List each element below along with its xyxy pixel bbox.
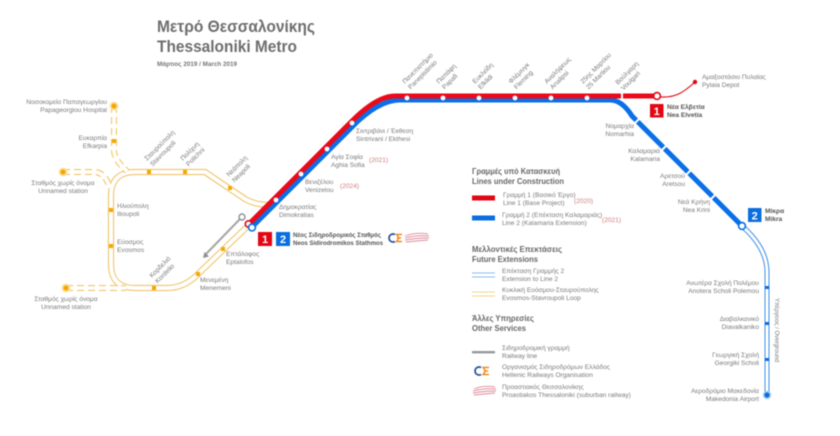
orange line terminals — [59, 102, 118, 292]
blue extension stations — [763, 286, 771, 399]
main line labels: Βούλγαρη — [614, 60, 641, 86]
Mikra badge: Mikra — [765, 216, 783, 223]
main line labels: Βενιζέλου — [305, 178, 334, 186]
legend: future extensions: Future Extensions — [472, 254, 538, 264]
Nea Elvetia badge: 1 — [654, 106, 660, 118]
orange loop line (future Evosmos-Stavroupoli) — [111, 172, 272, 288]
orange line station labels: Papageorgiou Hospital — [40, 107, 108, 114]
orange line station labels: Evosmos — [117, 247, 145, 254]
title — [157, 17, 315, 68]
interchange: Neos Sidirodromikos Stathmos: 1 — [262, 234, 268, 246]
orange line stations — [109, 139, 232, 290]
legend: future extensions: Evosmos-Stavroupoli Loop — [502, 295, 581, 302]
legend: lines under construction: (2021) — [602, 217, 621, 224]
main line labels: Ανωτέρα Σχολή Πολέμου — [686, 279, 759, 287]
legend: lines under construction: Line 1 (Base Project) — [503, 200, 565, 207]
orange dashed branches — [63, 106, 127, 288]
legend: other services: Άλλες Υπηρεσίες — [472, 313, 535, 323]
legend icon: OSE logo — [475, 367, 489, 375]
icon: Proastiakos logo — [405, 233, 429, 242]
Nea Elvetia badge: Νέα Ελβετία — [667, 103, 705, 111]
main line labels: Nea Krini — [683, 207, 711, 214]
legend: lines under construction: Γραμμές υπό Κατασκευή — [472, 166, 560, 176]
main line labels: Aretsou — [662, 181, 685, 188]
legend: lines under construction: Line 2 (Kalamaria Extension) — [502, 220, 587, 227]
main line labels: Φλέμινγκ — [507, 60, 532, 85]
legend: other services: Σιδηροδρομική γραμμή — [502, 345, 570, 352]
interchange: Neos Sidirodromikos Stathmos — [258, 232, 383, 247]
interchange: Neos Sidirodromikos Stathmos: Νέος Σιδηροδρομικός Σταθμός — [293, 232, 382, 239]
blue extension double line — [742, 226, 767, 395]
main line labels: Υπέργειος / Overground — [773, 298, 780, 362]
legend: other services: Proastiakos Thessaloniki (suburban railway) — [502, 392, 631, 399]
legend: other services: Οργανισμός Σιδηροδρόμων Ελλάδος — [502, 363, 610, 371]
orange line station labels: Neapoli — [231, 163, 252, 184]
main line labels: 25 Martiou — [585, 64, 612, 91]
Mikra badge: Μίκρα — [765, 208, 784, 215]
legend: other services: Railway line — [502, 353, 538, 360]
main line labels: Δημοκρατίας — [279, 203, 316, 211]
main line labels: Aghia Sofia — [331, 162, 365, 169]
interchange: Neos Sidirodromikos Stathmos: Neos Sidirodromikos Stathmos — [293, 240, 383, 247]
legend: future extensions: Κυκλική Ευόσμου-Σταυρούπολης — [502, 286, 599, 294]
main line labels — [279, 51, 780, 403]
legend icon: Proastiakos logo — [473, 386, 496, 395]
Mikra badge — [748, 208, 784, 223]
legend: future extensions: Μελλοντικές Επεκτάσεις — [472, 244, 563, 254]
orange line station labels: Εύοσμος — [117, 238, 143, 246]
orange line station labels: Σταθμός χωρίς όνομα — [31, 179, 95, 187]
orange line station labels: Επτάλοφος — [226, 250, 259, 258]
orange line station labels: Eptalofos — [226, 259, 254, 266]
orange line station labels: Νεάπολη — [225, 154, 249, 178]
orange line station labels: Stavroupoli — [149, 139, 178, 168]
orange line station labels: Σταθμός χωρίς όνομα — [34, 295, 98, 303]
line 1 red — [249, 96, 657, 224]
main line labels: Georgiki Scholi — [715, 360, 760, 367]
Nea Elvetia badge: Nea Elvetia — [667, 112, 703, 119]
main line labels: Voulgari — [620, 70, 642, 92]
legend: other services: Προαστιακός Θεσσαλονίκης — [502, 383, 584, 391]
orange line station labels: Πολίχνη — [179, 140, 201, 162]
main line labels: (2024) — [340, 183, 359, 190]
main line labels: Γεωργική Σχολή — [712, 352, 759, 359]
orange line station labels: Menemeni — [200, 285, 231, 292]
main line labels: (2021) — [369, 157, 388, 164]
legend: future extensions: Extension to Line 2 — [502, 276, 558, 283]
orange line station labels: Ευκαρπία — [78, 134, 107, 142]
main line labels: Anotera Scholi Polemou — [688, 288, 759, 295]
main line labels: Nomarhia — [605, 131, 634, 138]
main line labels: Diavalkaniko — [722, 324, 759, 331]
orange line station labels: Κορδελιό — [148, 255, 173, 279]
icon: OSE logo — [389, 234, 402, 242]
orange line station labels: Ilioupoli — [117, 211, 140, 218]
orange line station labels: Unnamed station — [41, 304, 91, 311]
title: Μετρό Θεσσαλονίκης — [157, 17, 315, 36]
main line labels: Fleming — [513, 69, 535, 91]
main line labels: Νομαρχία — [605, 122, 634, 130]
main line labels: Αμαξοστάσιο Πυλαίας — [702, 73, 766, 81]
main line labels: Αναλήψεως — [543, 56, 573, 85]
main line labels: 25ης Μαρτίου — [579, 51, 613, 85]
main line labels: Αρετσού — [660, 172, 685, 180]
main line labels: Παπάφη — [435, 62, 458, 85]
main line labels: Σιντριβάνι / Έκθεση — [356, 127, 414, 135]
legend: other services: Hellenic Railways Organisation — [502, 372, 593, 379]
main line labels: Analipsi — [549, 69, 571, 91]
main line labels: Efklidi — [477, 73, 495, 91]
legend: other services — [472, 313, 631, 399]
depot spur — [660, 80, 697, 97]
main line labels: Διαβαλκανικό — [720, 315, 759, 323]
legend: lines under construction: Lines under Construction — [472, 176, 564, 186]
orange line station labels: Kordelio — [154, 263, 176, 285]
orange line station labels: Unnamed station — [38, 188, 88, 195]
orange line station labels: Μενεμένη — [200, 276, 229, 284]
title: Thessaloniki Metro — [157, 37, 297, 56]
main line labels: Καλαμαριά — [628, 147, 660, 155]
main line labels: Αεροδρόμιο Μακεδονία — [691, 387, 759, 395]
main line labels: Venizelou — [305, 187, 334, 194]
main line labels: Αγία Σοφία — [331, 153, 363, 161]
line stations — [274, 93, 716, 202]
legend: future extensions — [472, 244, 599, 302]
interchange: Neos Sidirodromikos Stathmos: 2 — [280, 234, 286, 246]
main line labels: Νεά Κρήνη — [678, 198, 710, 206]
legend: lines under construction: (2020) — [574, 198, 593, 205]
line 2 blue — [252, 100, 742, 227]
interchange terminals — [245, 93, 745, 231]
legend: other services: Other Services — [472, 323, 526, 333]
main line labels: Dimokratias — [279, 212, 315, 219]
main line labels: Panepistimio — [407, 59, 439, 91]
orange line station labels: Σταυρούπολη — [143, 128, 177, 162]
main line labels: Makedonia Airport — [706, 396, 759, 403]
title: Μάρτιος 2019 / March 2019 — [157, 62, 238, 68]
main line labels: Kalamaria — [630, 156, 660, 163]
orange line station labels — [26, 98, 259, 311]
main line labels: Pylaia Depot — [702, 82, 740, 89]
orange line station labels: Νοσοκομείο Παπαγεωργίου — [26, 98, 107, 106]
legend: future extensions: Επέκταση Γραμμής 2 — [502, 267, 565, 275]
legend: lines under construction: Γραμμή 1 (Βασικό Έργο) — [503, 191, 576, 199]
main line labels: Ευκλείδη — [471, 61, 495, 85]
orange line station labels: Efkarpia — [83, 143, 107, 150]
main line labels: Sintrivani / Ekthesi — [356, 136, 411, 143]
Nea Elvetia badge — [650, 103, 705, 119]
orange line station labels: Ηλιούπολη — [117, 202, 149, 210]
legend: lines under construction: Γραμμή 2 (Επέκταση Καλαμαριάς) — [502, 211, 602, 219]
Mikra badge: 2 — [752, 210, 758, 222]
railway line with arrow — [203, 214, 245, 258]
legend: lines under construction — [472, 166, 621, 227]
main line labels: Πανεπιστήμιο — [401, 52, 435, 85]
main line labels: Papafi — [441, 73, 460, 91]
orange line station labels: Polichni — [185, 146, 207, 168]
